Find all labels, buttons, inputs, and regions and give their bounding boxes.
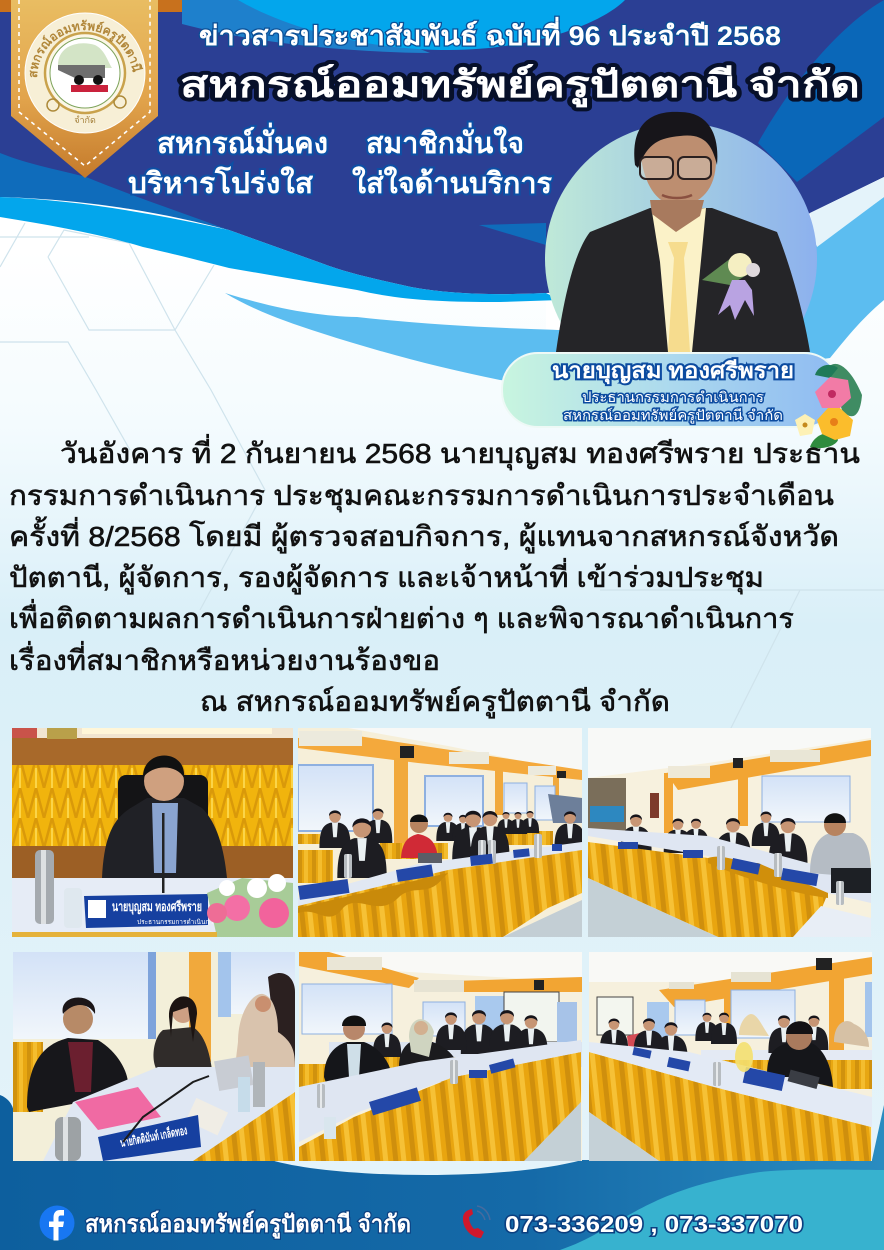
newsletter issue heading: ข่าวสารประชาสัมพันธ์ ฉบับที่ 96 ประจำปี 2568	[199, 16, 781, 51]
corsage	[702, 253, 760, 320]
name panel: สหกรณ์ออมทรัพย์ครูปัตตานี จำกัด	[563, 407, 783, 424]
position: ประธานกรรมการดำเนินการ	[582, 389, 765, 405]
footer wave	[0, 1095, 884, 1250]
name card	[98, 1115, 201, 1161]
slogan	[128, 122, 552, 200]
photo 3: meeting room	[588, 728, 871, 937]
photo 4: three attendees	[13, 952, 295, 1161]
name card: นายบุญสม ทองศรีพราย	[112, 899, 202, 915]
body paragraph: ครั้งที่ 8/2568 โดยมี ผู้ตรวจสอบกิจการ, ผู้แทนจากสหกรณ์จังหวัด	[9, 516, 839, 554]
body paragraph: ปัตตานี, ผู้จัดการ, รองผู้จัดการ และเจ้าหน้าที่ เข้าร่วมประชุม	[9, 558, 764, 595]
name card	[84, 894, 217, 928]
name card: ประธานกรรมการดำเนินการ	[137, 918, 217, 926]
name card: นายกิตติมันท์ เกล็ดทอง	[119, 1122, 188, 1150]
body paragraph: เพื่อติดตามผลการดำเนินการฝ่ายต่าง ๆ และพิจารณาดำเนินการ	[9, 599, 794, 634]
main title: สหกรณ์ออมทรัพย์ครูปัตตานี จำกัด	[180, 64, 860, 108]
logo seal: จำกัด	[74, 115, 96, 125]
icon: facebook	[40, 1206, 74, 1240]
logo badge	[0, 0, 182, 178]
ribbon top	[0, 0, 182, 16]
name: นายบุญสม ทองศรีพราย	[552, 358, 794, 385]
photo 5: meeting room	[299, 952, 582, 1161]
portrait circle	[545, 123, 817, 395]
name panel	[502, 353, 840, 427]
slogan: บริหารโปร่งใส	[128, 165, 313, 200]
portrait: chairman	[556, 112, 810, 352]
logo seal	[24, 12, 146, 134]
slogan: สหกรณ์มั่นคง	[157, 122, 328, 160]
top wave banner	[0, 0, 884, 390]
photo 1: chairman at table	[12, 728, 293, 937]
logo seal: สหกรณ์ออมทรัพย์ครูปัตตานี	[30, 20, 144, 78]
icon: flowers	[795, 364, 862, 448]
body paragraph: กรรมการดำเนินการ ประชุมคณะกรรมการดำเนินการประจำเดือน	[9, 480, 834, 513]
icon: phone	[463, 1206, 490, 1238]
body paragraph: ณ สหกรณ์ออมทรัพย์ครูปัตตานี จำกัด	[200, 686, 670, 719]
slogan: ใส่ใจด้านบริการ	[352, 166, 552, 200]
body paragraph	[9, 434, 860, 719]
slogan: สมาชิกมั่นใจ	[366, 122, 524, 160]
phone numbers: 073-336209 , 073-337070	[505, 1211, 803, 1237]
photo 6: meeting room	[589, 952, 872, 1161]
body paragraph: วันอังคาร ที่ 2 กันยายน 2568 นายบุญสม ทองศรีพราย ประธาน	[60, 434, 860, 471]
facebook page name: สหกรณ์ออมทรัพย์ครูปัตตานี จำกัด	[85, 1210, 411, 1239]
body paragraph: เรื่องที่สมาชิกหรือหน่วยงานร้องขอ	[9, 641, 440, 676]
photo 2: meeting room	[298, 728, 582, 937]
